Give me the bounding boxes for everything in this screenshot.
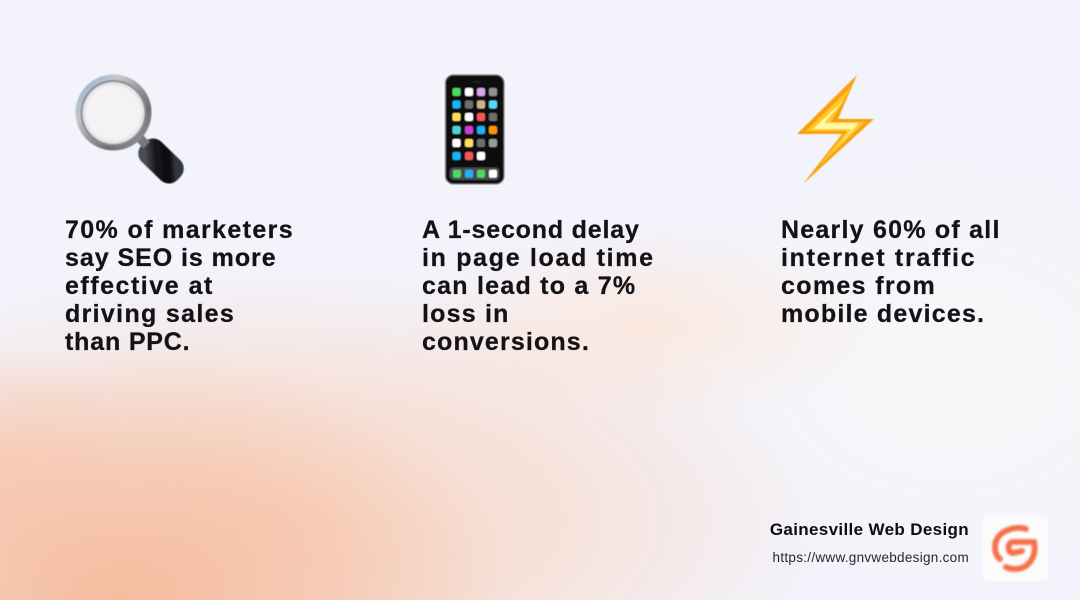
text block: page load statistic: in page load time bbox=[422, 244, 655, 272]
text block: page load statistic bbox=[422, 216, 655, 356]
text block: mobile traffic statistic: comes from bbox=[781, 272, 936, 300]
text block: page load statistic: loss in bbox=[422, 300, 510, 328]
text block: mobile traffic statistic: internet traffic bbox=[781, 244, 976, 272]
handle bbox=[133, 134, 189, 188]
icon: magnifying glass bbox=[75, 74, 184, 184]
text block: mobile traffic statistic bbox=[781, 216, 1001, 328]
icon: smartphone bbox=[444, 74, 506, 186]
text block: SEO statistic: effective at bbox=[65, 272, 214, 300]
text block: SEO statistic: 70% of marketers bbox=[65, 216, 294, 244]
text block: page load statistic: A 1-second delay bbox=[422, 216, 640, 244]
text block: SEO statistic: than PPC. bbox=[65, 328, 190, 356]
text block: mobile traffic statistic: Nearly 60% of all bbox=[781, 216, 1001, 244]
text block: mobile traffic statistic: mobile devices. bbox=[781, 300, 985, 328]
icon: lightning bolt bbox=[796, 74, 874, 184]
logo bbox=[982, 523, 1048, 581]
website url: https://www.gnvwebdesign.com bbox=[773, 550, 969, 565]
text block: page load statistic: conversions. bbox=[422, 328, 590, 356]
text block: page load statistic: can lead to a 7% bbox=[422, 272, 636, 300]
text block: SEO statistic bbox=[65, 216, 294, 356]
text block: SEO statistic: say SEO is more bbox=[65, 244, 277, 272]
text block: SEO statistic: driving sales bbox=[65, 300, 235, 328]
lens bbox=[76, 74, 152, 150]
brand name: Gainesville Web Design bbox=[770, 520, 969, 539]
